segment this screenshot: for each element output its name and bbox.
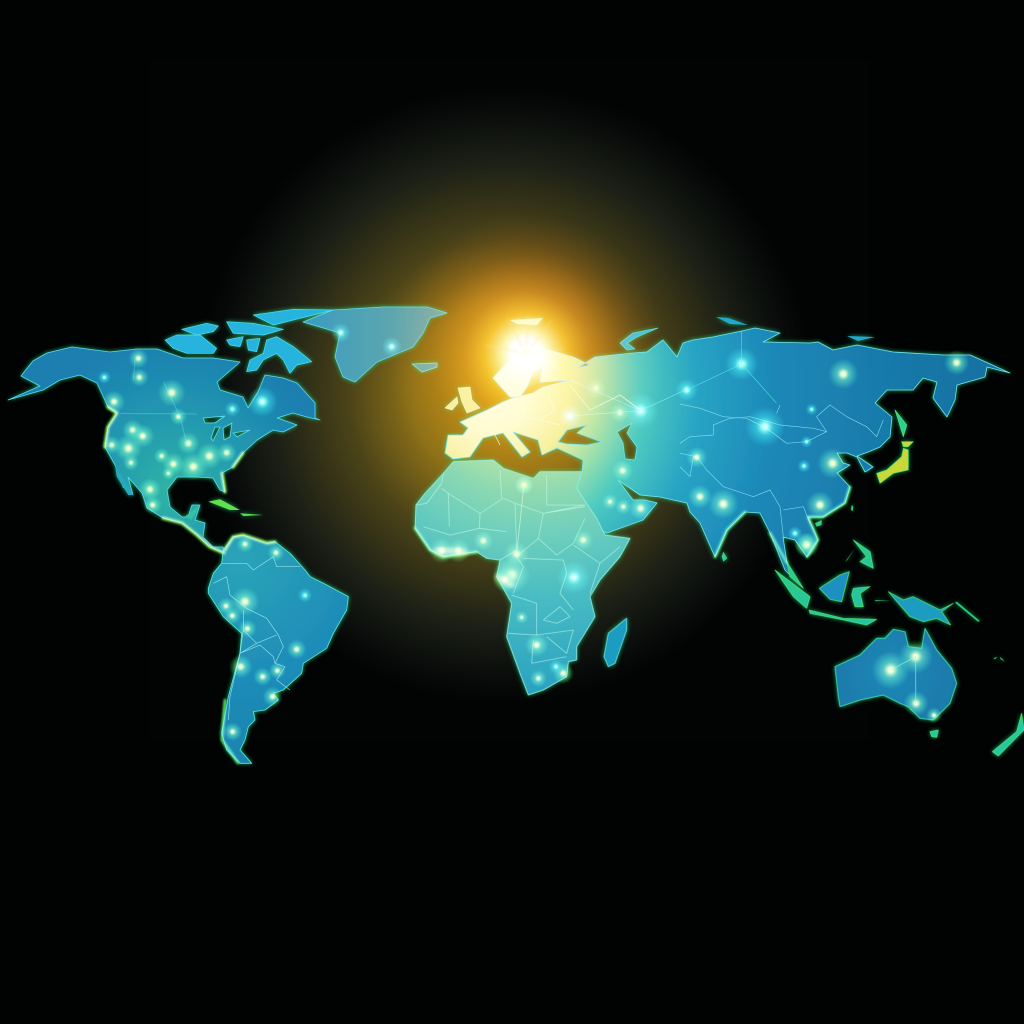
Svalbard	[510, 318, 543, 325]
North America	[8, 347, 320, 553]
Southeast Asia and Oceania islands	[775, 540, 1024, 756]
British Isles	[445, 387, 480, 413]
sun flare over Scandinavia	[386, 214, 666, 494]
Arctic islands of Canada	[165, 309, 333, 373]
background light glow	[150, 60, 870, 740]
flare halo	[386, 214, 666, 494]
glowing coastlines	[105, 407, 850, 763]
Greenland	[303, 307, 447, 382]
Siberian Arctic island	[716, 317, 875, 341]
Asian borders	[680, 404, 883, 537]
Caribbean islands	[115, 465, 263, 520]
North American lights	[98, 323, 402, 514]
African lights	[429, 476, 593, 687]
Sri Lanka	[722, 552, 727, 562]
Sakhalin	[895, 410, 907, 437]
European borders	[463, 385, 640, 445]
Japan	[680, 404, 913, 562]
African borders	[417, 470, 620, 663]
Madagascar	[604, 618, 627, 667]
South America	[208, 535, 348, 763]
Novaya Zemlya	[620, 328, 658, 350]
Taiwan and Hainan	[815, 505, 853, 527]
Western Asia and Europe lights	[515, 378, 687, 520]
Australian lights	[795, 533, 942, 723]
flare rays	[485, 315, 565, 378]
city lights	[98, 323, 969, 741]
landmasses	[8, 307, 1024, 763]
Africa	[415, 460, 630, 695]
Eurasian lights	[675, 331, 969, 558]
South American lights	[217, 535, 312, 741]
Eurasia	[445, 328, 1010, 585]
Australia	[835, 628, 957, 720]
Iceland	[412, 363, 437, 372]
South American borders	[213, 557, 300, 720]
